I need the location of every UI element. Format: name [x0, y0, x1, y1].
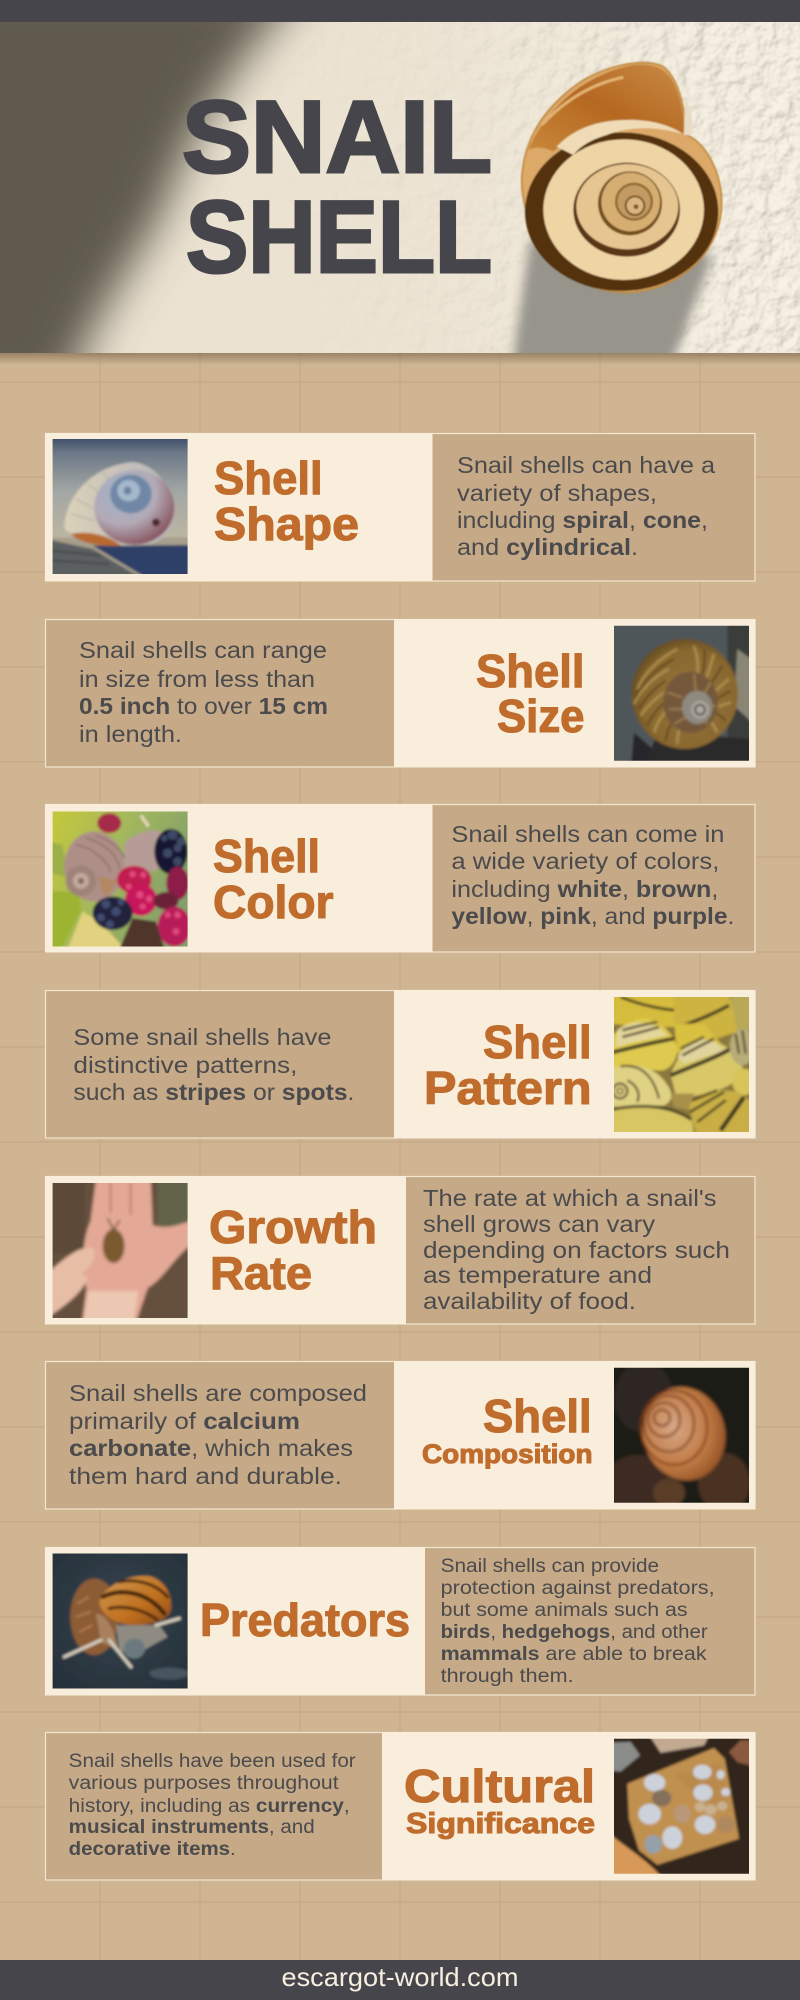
footer website: escargot-world.com — [282, 1962, 518, 1992]
panel: growth rate — [45, 1175, 755, 1326]
description: a wide variety of colors, — [451, 848, 719, 874]
heading: Color — [213, 876, 334, 928]
heading: Shell — [214, 452, 323, 504]
panel: shell size — [46, 619, 756, 767]
description: mammals are able to break — [441, 1644, 707, 1665]
heading — [422, 1390, 592, 1469]
panel: shell shape — [45, 432, 755, 581]
description: history, including as currency , — [69, 1796, 350, 1817]
description — [69, 1380, 367, 1489]
heading — [476, 645, 584, 742]
heading — [404, 1760, 595, 1840]
description: but some animals such as — [441, 1600, 688, 1621]
heading: Shell — [483, 1390, 592, 1442]
header drop shadow — [0, 353, 800, 365]
image: snail on berries — [52, 812, 188, 946]
panel: shell pattern — [46, 990, 756, 1139]
description: depending on factors such — [423, 1237, 730, 1263]
heading: Size — [497, 690, 584, 742]
image: shells on a stone — [614, 1738, 749, 1874]
description — [79, 637, 328, 747]
heading — [213, 830, 334, 928]
heading: Shell — [483, 1016, 592, 1068]
description: Snail shells can come in — [451, 821, 724, 847]
image: white shell on boards — [52, 439, 188, 574]
description: variety of shapes, — [457, 480, 657, 506]
description: them hard and durable. — [69, 1463, 342, 1489]
wall shadow — [0, 22, 314, 353]
description: such as stripes or spots. — [73, 1079, 354, 1105]
description: shell grows can vary — [423, 1211, 656, 1237]
heading: Rate — [210, 1247, 312, 1299]
description — [457, 452, 716, 560]
heading — [424, 1016, 592, 1114]
description: Snail shells can provide — [441, 1556, 659, 1577]
description: including spiral, cone, — [457, 507, 708, 533]
description: as temperature and — [423, 1262, 652, 1288]
snail illustration — [512, 63, 722, 370]
heading: Shape — [214, 498, 359, 550]
title — [183, 99, 490, 274]
panel: shell color — [45, 804, 755, 953]
image: brown striped shell — [614, 626, 749, 761]
image: snail on a hand — [52, 1183, 188, 1318]
description — [441, 1556, 715, 1687]
panel: cultural significance — [46, 1732, 756, 1880]
description: in length. — [79, 721, 182, 747]
heading: Shell — [213, 830, 320, 882]
heading — [209, 1201, 377, 1299]
description: Snail shells have been used for — [69, 1751, 356, 1772]
description: Snail shells can have a — [457, 452, 716, 478]
description: carbonate , which makes — [69, 1435, 353, 1461]
panel: shell composition — [46, 1360, 757, 1513]
description: Snail shells are composed — [69, 1380, 367, 1406]
description: decorative items . — [69, 1839, 236, 1860]
description: various purposes throughout — [69, 1773, 340, 1794]
description: musical instruments , and — [69, 1817, 315, 1838]
description: in size from less than — [79, 666, 315, 692]
description: distinctive patterns, — [73, 1052, 297, 1078]
title: SHELL — [186, 180, 492, 294]
description — [69, 1751, 356, 1860]
description: The rate at which a snail's — [423, 1185, 716, 1211]
description: 0.5 inch to over 15 cm — [79, 693, 328, 719]
heading: Predators — [200, 1594, 410, 1646]
heading: Shell — [476, 645, 584, 697]
description: through them. — [441, 1666, 574, 1687]
heading — [214, 452, 359, 550]
footer bar — [0, 1960, 800, 2000]
description: primarily of calcium — [69, 1408, 300, 1434]
heading: Pattern — [424, 1062, 592, 1114]
cast shadow — [512, 240, 713, 370]
image: yellow striped shells — [614, 997, 749, 1132]
heading: Growth — [209, 1201, 377, 1253]
heading: Composition — [422, 1439, 592, 1469]
panel: predators — [45, 1547, 755, 1695]
description: birds, hedgehogs , and other — [441, 1622, 708, 1643]
heading: Significance — [406, 1808, 595, 1840]
description: yellow, pink, and purple. — [451, 903, 734, 929]
description: Some snail shells have — [73, 1024, 331, 1050]
description — [423, 1185, 730, 1314]
image: orange shell in the dark — [614, 1368, 749, 1503]
description — [73, 1024, 354, 1105]
description: including white, brown, — [451, 876, 718, 902]
title: SNAIL — [182, 80, 492, 194]
description: protection against predators, — [441, 1578, 715, 1599]
description: availability of food. — [423, 1288, 636, 1314]
description: and cylindrical . — [457, 534, 638, 560]
image: snail with antennae — [52, 1554, 188, 1688]
header photo: snail on wall — [0, 22, 800, 353]
top bar — [0, 0, 800, 22]
description — [451, 821, 734, 929]
heading: Cultural — [404, 1760, 595, 1812]
description: Snail shells can range — [79, 637, 327, 663]
